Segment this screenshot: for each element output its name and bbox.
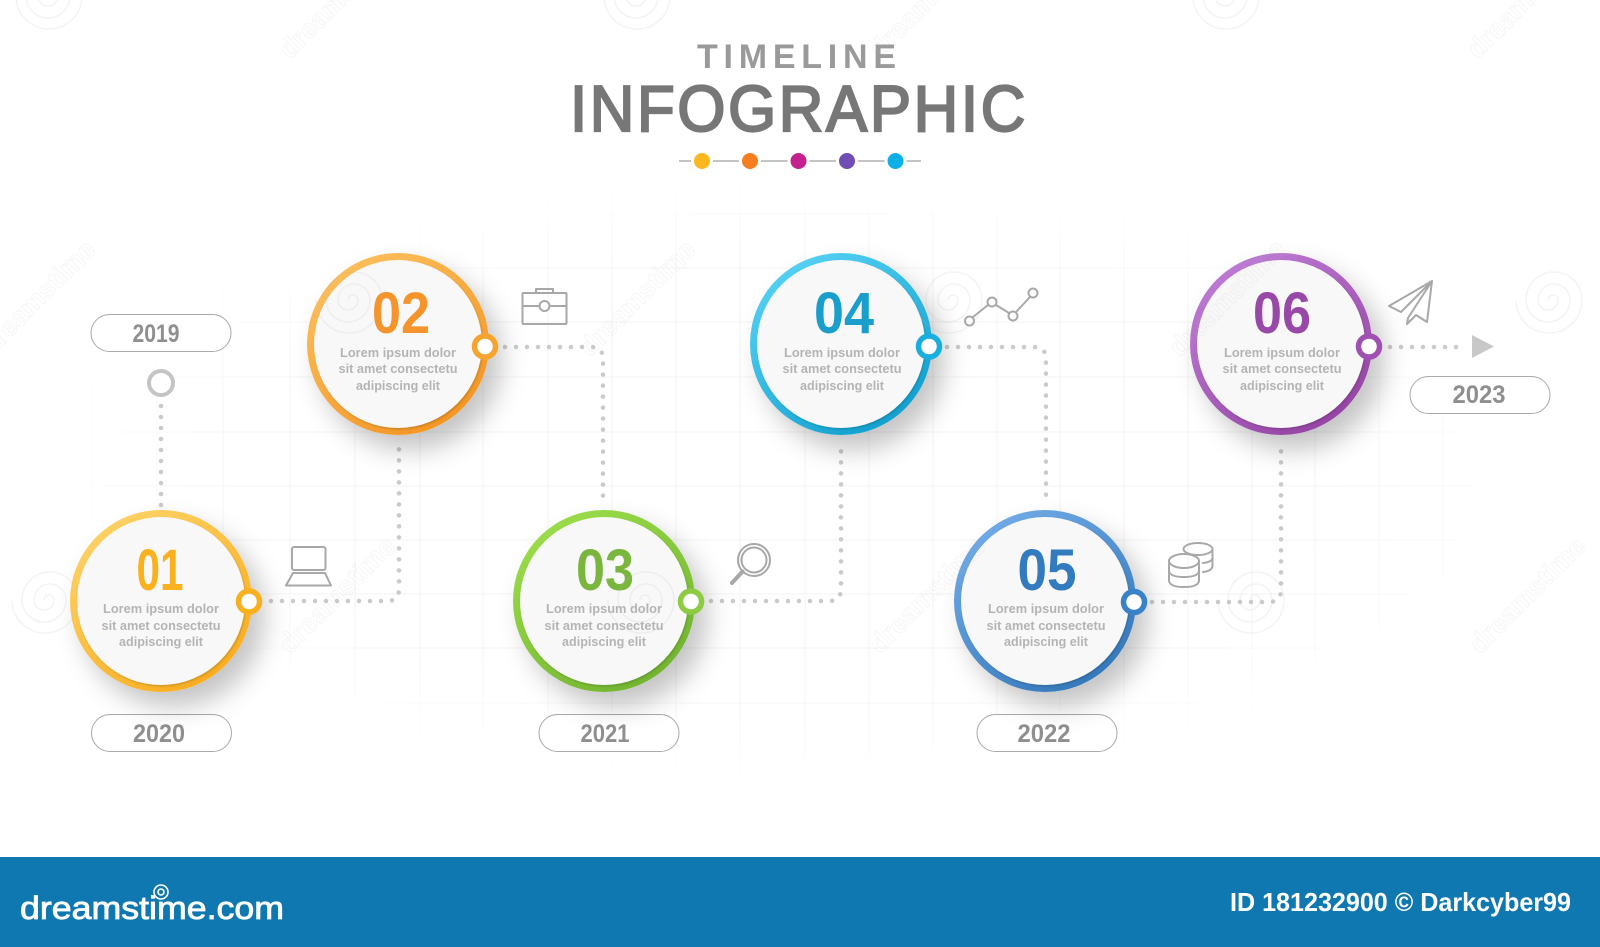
icon: coins: [1169, 543, 1212, 587]
footer logo spiral: [154, 885, 168, 899]
pill: 2020: [92, 714, 232, 752]
step 05: [954, 510, 1144, 692]
step 01: 01: [136, 538, 184, 603]
step 01: Lorem ipsum dolor: [103, 601, 219, 616]
watermark: dreamstime: [573, 234, 701, 362]
step 04: adipiscing elit: [800, 378, 885, 393]
step 02: adipiscing elit: [356, 378, 441, 393]
icon: line chart: [965, 288, 1038, 326]
pill: 2022: [977, 714, 1117, 752]
pill: 2019: 2019: [132, 320, 180, 348]
pill: 2019: [91, 314, 231, 352]
step 05: Lorem ipsum dolor: [988, 601, 1104, 616]
pill: 2023: 2023: [1452, 381, 1506, 409]
step 06: sit amet consectetu: [1222, 361, 1342, 376]
step 03: adipiscing elit: [562, 634, 647, 649]
dotted connectors: [161, 347, 1466, 602]
step 05: sit amet consectetu: [986, 618, 1106, 633]
title divider with colored dots: [679, 152, 921, 170]
step 01: adipiscing elit: [119, 634, 204, 649]
step 04: Lorem ipsum dolor: [784, 345, 900, 360]
step 03: [513, 510, 702, 692]
step 05: adipiscing elit: [1004, 634, 1089, 649]
heading: TIMELINE: TIMELINE: [697, 38, 896, 76]
step 02: sit amet consectetu: [338, 361, 458, 376]
step 03: 03: [576, 538, 634, 603]
step 01: [70, 510, 260, 692]
watermark: dreamstime: [1163, 234, 1291, 362]
step 06: adipiscing elit: [1240, 378, 1325, 393]
icon: paper plane: [1389, 281, 1432, 324]
icon: laptop: [286, 547, 331, 586]
watermark: dreamstime: [863, 531, 991, 659]
step 02: 02: [372, 281, 430, 346]
step 01: sit amet consectetu: [102, 618, 221, 633]
watermark: dreamstime: [273, 531, 401, 659]
pill: 2021: [539, 714, 679, 752]
pill: 2020: 2020: [133, 720, 185, 748]
watermark: dreamstime: [1463, 531, 1591, 659]
icon: magnifier: [732, 544, 770, 583]
step 04: [750, 253, 940, 435]
pill: 2022: 2022: [1018, 720, 1070, 748]
footer credit: ID 181232900 © Darkcyber99: [1230, 887, 1571, 917]
step 04: sit amet consectetu: [782, 361, 902, 376]
icon: briefcase: [522, 289, 566, 324]
step 02: [307, 253, 496, 435]
pill: 2023: [1410, 376, 1550, 414]
step 02: Lorem ipsum dolor: [340, 345, 456, 360]
step 03: Lorem ipsum dolor: [546, 601, 662, 616]
step 06: [1190, 253, 1380, 435]
step 06: Lorem ipsum dolor: [1224, 345, 1340, 360]
heading: INFOGRAPHIC: INFOGRAPHIC: [570, 74, 1028, 145]
pill: 2021: 2021: [580, 720, 630, 748]
footer logo text: dreamstime.com: [20, 890, 284, 926]
step 04: 04: [814, 281, 874, 346]
step 05: 05: [1018, 538, 1076, 603]
footer bar: [0, 857, 1600, 947]
step 06: 06: [1253, 281, 1311, 346]
watermark: [0, 0, 1591, 659]
start marker 2019: [149, 371, 173, 395]
step 03: sit amet consectetu: [544, 618, 664, 633]
arrow head: [1472, 335, 1494, 358]
